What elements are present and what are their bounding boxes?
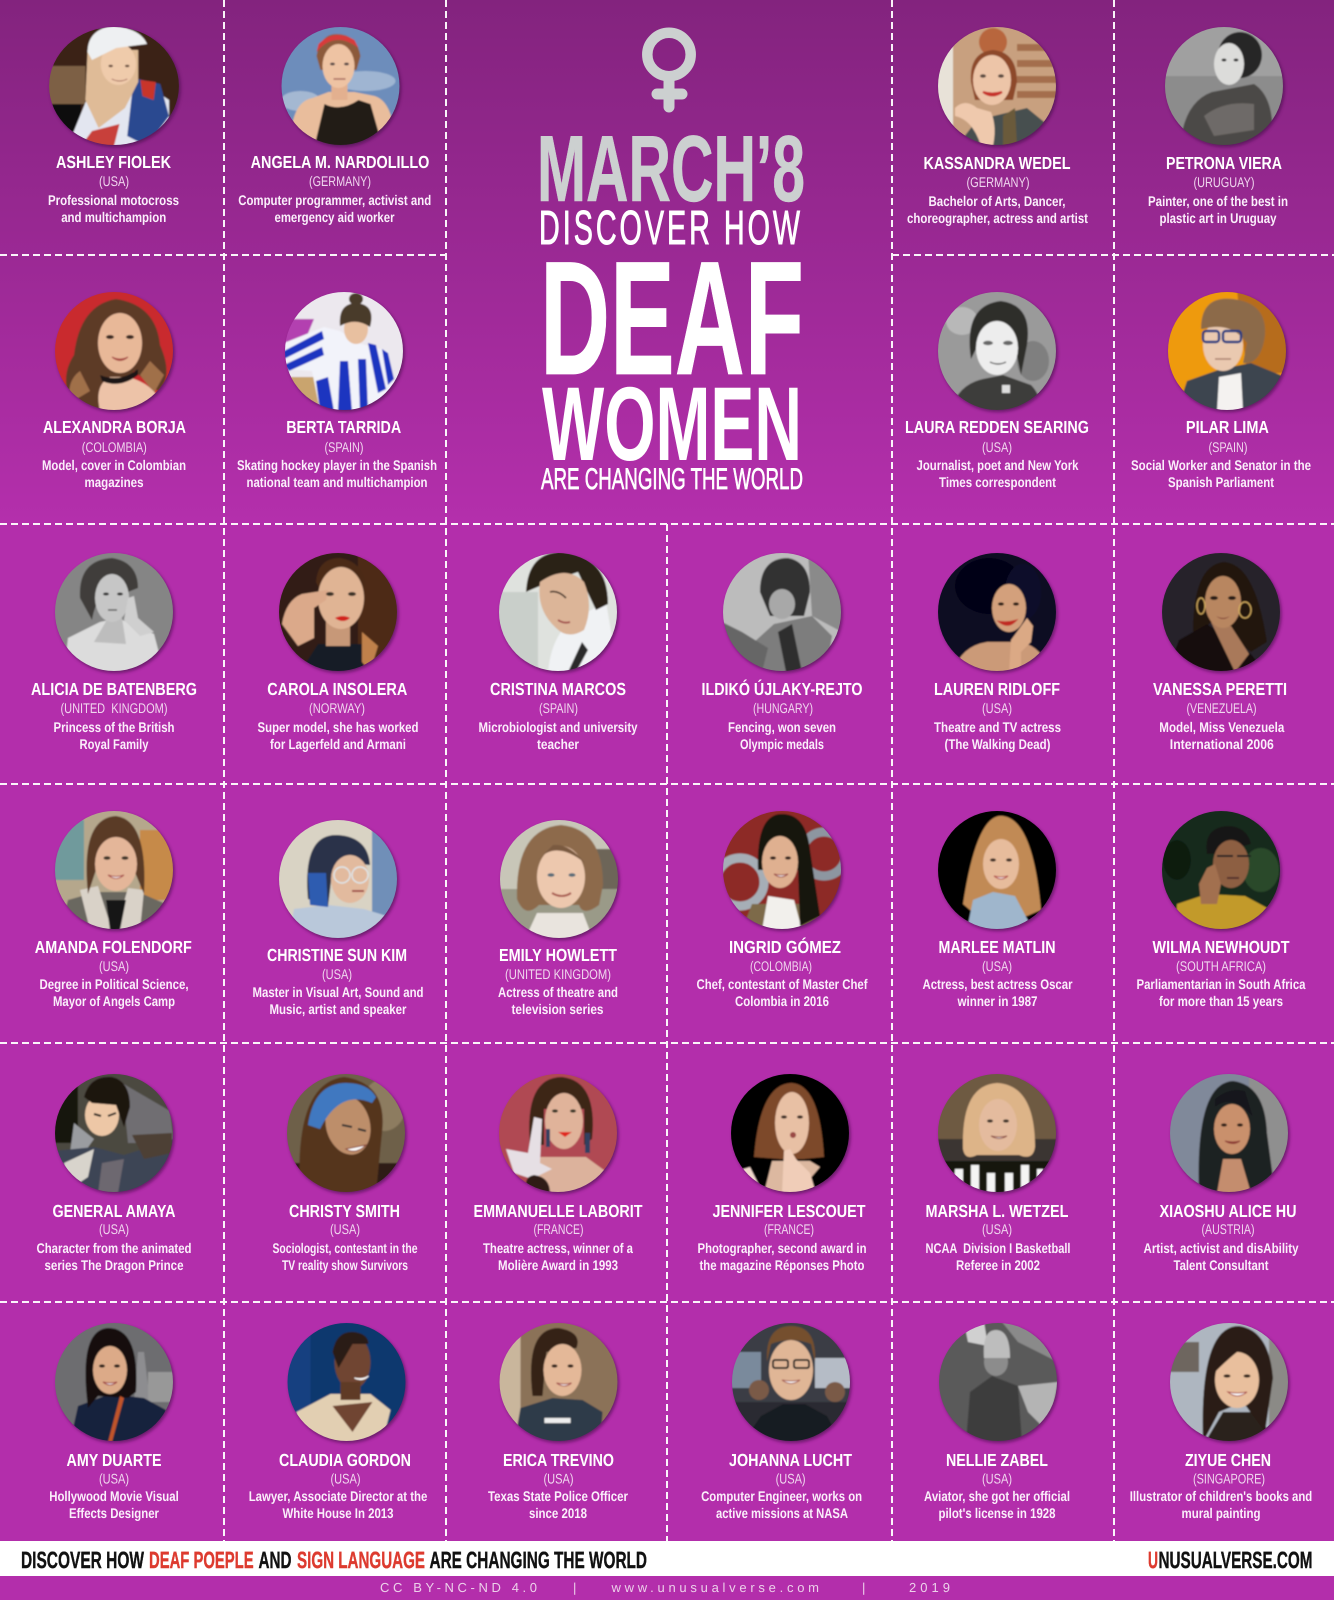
description: television series [512, 1001, 604, 1017]
card: Claudia Gordon [249, 1322, 427, 1521]
portrait: Emmanuelle Laborit [498, 1073, 618, 1194]
name: LAUREN RIDLOFF [934, 679, 1060, 699]
card: Laura Redden Searing [905, 291, 1089, 490]
banner headline: AND [258, 1547, 292, 1573]
country: (USA) [982, 700, 1012, 716]
description: since 2018 [529, 1505, 587, 1521]
name: CRISTINA MARCOS [490, 679, 626, 699]
name: EMMANUELLE LABORIT [474, 1201, 643, 1221]
card: Nellie Zabel [924, 1322, 1070, 1521]
description [49, 1488, 179, 1521]
portrait: Berta Tarrida [284, 291, 404, 412]
country: (FRANCE) [764, 1221, 814, 1237]
description: winner in 1987 [957, 993, 1038, 1009]
footer credits: | [862, 1580, 865, 1595]
description: mural painting [1182, 1505, 1260, 1521]
name: BERTA TARRIDA [286, 417, 401, 437]
portrait: Johanna Lucht [731, 1322, 852, 1443]
card: Cristina Marcos [478, 552, 638, 752]
description: Colombia in 2016 [735, 993, 829, 1009]
country: (COLOMBIA) [750, 958, 812, 974]
footer credits [380, 1580, 950, 1595]
description: International 2006 [1170, 736, 1274, 752]
description: Music, artist and speaker [270, 1001, 407, 1017]
description: Computer Engineer, works on [701, 1488, 862, 1504]
card: Wilma Newhoudt [1136, 810, 1306, 1009]
name: ASHLEY FIOLEK [56, 152, 171, 172]
country: (USA) [982, 958, 1012, 974]
icon: female symbol [647, 33, 691, 107]
description: Olympic medals [740, 736, 824, 752]
description: emergency aid worker [274, 209, 395, 225]
description: choreographer, actress and artist [907, 210, 1088, 226]
description [922, 976, 1073, 1009]
country: (SPAIN) [324, 439, 364, 455]
description: (The Walking Dead) [944, 736, 1050, 752]
banner headline: ARE CHANGING THE WORLD [430, 1547, 647, 1573]
card: Amy Duarte [49, 1322, 179, 1521]
description [54, 719, 174, 752]
card: Pilar Lima [1131, 291, 1311, 490]
portrait: Christy Smith [286, 1073, 406, 1194]
description [498, 984, 618, 1017]
country: (USA) [982, 1470, 1012, 1486]
card: Kassandra Wedel [907, 26, 1088, 226]
bottom white banner [0, 1541, 1334, 1576]
description [42, 457, 186, 490]
footer credits: 2019 [909, 1580, 950, 1595]
description [916, 457, 1079, 490]
title: Women: WOMEN [542, 366, 802, 483]
country: (USA) [99, 958, 129, 974]
country: (USA) [544, 1470, 574, 1486]
name: MARSHA L. WETZEL [926, 1201, 1069, 1221]
portrait: Carola Insolera [278, 552, 398, 673]
banner headline: DEAF POEPLE [149, 1547, 254, 1573]
description: Journalist, poet and New York [916, 457, 1079, 473]
portrait: Amanda Folendorf [54, 810, 174, 931]
portrait: Lauren Ridloff [937, 552, 1058, 673]
country: (GERMANY) [966, 174, 1030, 190]
country: (USA) [99, 1221, 129, 1237]
country: (AUSTRIA) [1202, 1221, 1254, 1237]
portrait: Xiaoshu Alice Hu [1169, 1073, 1290, 1194]
description [1131, 457, 1311, 490]
portrait: Angela M. Nardolillo [280, 26, 401, 147]
banner headline: DISCOVER HOW [21, 1547, 145, 1573]
footer credits: CC BY-NC-ND 4.0 [380, 1580, 537, 1595]
description [1130, 1488, 1312, 1521]
description: Talent Consultant [1174, 1257, 1269, 1273]
description: active missions at NASA [716, 1505, 848, 1521]
title: Deaf: DEAF [540, 228, 804, 409]
description: Times correspondent [939, 474, 1056, 490]
card: Vanessa Peretti [1153, 552, 1287, 752]
name: CLAUDIA GORDON [279, 1450, 411, 1470]
name: PETRONA VIERA [1166, 153, 1282, 173]
title: March'8: MARCH’8 [537, 116, 805, 221]
description [40, 976, 188, 1009]
description [272, 1240, 418, 1273]
description: Referee in 2002 [956, 1257, 1040, 1273]
description: Effects Designer [69, 1505, 159, 1521]
name: ERICA TREVINO [503, 1450, 614, 1470]
portrait: Ziyue Chen [1169, 1322, 1290, 1443]
country: (USA) [330, 1221, 360, 1237]
country: (USA) [99, 1470, 129, 1486]
card: Emmanuelle Laborit [474, 1073, 643, 1273]
description: magazines [84, 474, 144, 490]
card: Ziyue Chen [1130, 1322, 1312, 1521]
portrait: Petrona Viera [1164, 26, 1284, 147]
footer credits: | [573, 1580, 576, 1595]
name: JOHANNA LUCHT [729, 1450, 852, 1470]
title: are changing the world: ARE CHANGING THE WORLD [541, 463, 803, 496]
description [238, 192, 431, 225]
description: Actress, best actress Oscar [922, 976, 1073, 992]
description [701, 1488, 862, 1521]
country: (NORWAY) [309, 700, 365, 716]
description [1136, 976, 1306, 1009]
card: General Amaya [36, 1073, 192, 1273]
country: (FRANCE) [534, 1221, 584, 1237]
description [926, 1240, 1070, 1273]
portrait: Claudia Gordon [286, 1322, 407, 1443]
country: (GERMANY) [309, 173, 371, 189]
description: Lawyer, Associate Director at the [249, 1488, 427, 1504]
description [249, 1488, 427, 1521]
description [478, 719, 638, 752]
country: (USA) [776, 1470, 806, 1486]
card: Jennifer Lescouet [698, 1073, 866, 1273]
description: Princess of the British [54, 719, 174, 735]
name: WILMA NEWHOUDT [1152, 937, 1290, 957]
country: (USA) [982, 439, 1012, 455]
description: national team and multichampion [246, 474, 428, 490]
name: LAURA REDDEN SEARING [905, 417, 1089, 437]
card: Lauren Ridloff [934, 552, 1061, 752]
description: Super model, she has worked [258, 719, 418, 735]
portrait: Nellie Zabel [938, 1322, 1058, 1443]
banner headline: SIGN LANGUAGE [297, 1547, 425, 1573]
description: Computer programmer, activist and [238, 192, 431, 208]
title: Discover how: DISCOVER HOW [539, 202, 803, 255]
description: NCAA Division I Basketball [926, 1240, 1070, 1256]
name: CHRISTY SMITH [289, 1201, 400, 1221]
banner brand: Unusualverse.com: U [1148, 1547, 1158, 1573]
country: (USA) [330, 1470, 360, 1486]
name: KASSANDRA WEDEL [924, 153, 1071, 173]
description [36, 1240, 192, 1273]
description [252, 984, 424, 1017]
card: Emily Howlett [498, 819, 620, 1017]
description: Model, cover in Colombian [42, 457, 186, 473]
name: ALICIA DE BATENBERG [31, 679, 197, 699]
description: pilot's license in 1928 [938, 1505, 1056, 1521]
description: Artist, activist and disAbility [1144, 1240, 1299, 1256]
description: Actress of theatre and [498, 984, 618, 1000]
portrait: Kassandra Wedel [937, 26, 1058, 147]
title block [537, 33, 805, 496]
name: VANESSA PERETTI [1153, 679, 1287, 699]
card: Xiaoshu Alice Hu [1144, 1073, 1299, 1273]
description: Spanish Parliament [1168, 474, 1274, 490]
description [483, 1240, 633, 1273]
portrait: General Amaya [54, 1073, 174, 1194]
portrait: Pilar Lima [1167, 291, 1288, 412]
portrait: Marsha L. Wetzel [937, 1073, 1058, 1194]
description: Mayor of Angels Camp [53, 993, 175, 1009]
description: the magazine Réponses Photo [700, 1257, 864, 1273]
description [934, 719, 1061, 752]
description: Molière Award in 1993 [498, 1257, 618, 1273]
portrait: Jennifer Lescouet [730, 1073, 850, 1194]
card: Ingrid Gómez [696, 810, 868, 1009]
country: (COLOMBIA) [82, 439, 147, 455]
name: ILDIKÓ ÚJLAKY-REJTO [702, 679, 862, 699]
description: Professional motocross [48, 192, 179, 208]
description [924, 1488, 1070, 1521]
name: CAROLA INSOLERA [267, 679, 408, 699]
portrait: Erica Trevino [498, 1322, 619, 1443]
portrait: Wilma Newhoudt [1161, 810, 1282, 931]
description: for Lagerfeld and Armani [270, 736, 406, 752]
name: EMILY HOWLETT [499, 945, 617, 965]
name: ALEXANDRA BORJA [43, 417, 186, 437]
description: Fencing, won seven [728, 719, 836, 735]
country: (URUGUAY) [1194, 174, 1254, 190]
card: Angela M. Nardolillo [238, 26, 431, 225]
card: Johanna Lucht [701, 1322, 862, 1521]
card: Berta Tarrida [237, 291, 437, 490]
portrait: Ashley Fiolek [48, 26, 181, 147]
description: plastic art in Uruguay [1160, 210, 1277, 226]
country: (UNITED KINGDOM) [60, 700, 168, 716]
description: Texas State Police Officer [488, 1488, 628, 1504]
card: Petrona Viera [1148, 26, 1288, 226]
name: GENERAL AMAYA [52, 1201, 176, 1221]
name: PILAR LIMA [1186, 417, 1269, 437]
description: Skating hockey player in the Spanish [237, 457, 437, 473]
name: CHRISTINE SUN KIM [267, 945, 407, 965]
description: teacher [537, 736, 579, 752]
description [237, 457, 437, 490]
description: Degree in Political Science, [40, 976, 188, 992]
portrait: Laura Redden Searing [937, 291, 1058, 412]
description: Hollywood Movie Visual [49, 1488, 179, 1504]
portrait: Ingrid Gómez [716, 810, 846, 931]
portrait: Christine Sun Kim [278, 819, 398, 940]
description: Microbiologist and university [478, 719, 638, 735]
card: Ashley Fiolek [48, 26, 181, 225]
country: (SPAIN) [1208, 439, 1248, 455]
description [48, 192, 179, 225]
description [1144, 1240, 1299, 1273]
name: XIAOSHU ALICE HU [1160, 1201, 1296, 1221]
description [696, 976, 868, 1009]
country: (SPAIN) [539, 700, 578, 716]
description: Character from the animated [36, 1240, 192, 1256]
country: (VENEZUELA) [1186, 700, 1256, 716]
name: NELLIE ZABEL [946, 1450, 1048, 1470]
name: AMY DUARTE [66, 1450, 162, 1470]
card: Christine Sun Kim [252, 819, 424, 1017]
card: Marlee Matlin [922, 810, 1073, 1009]
description [1148, 193, 1288, 226]
name: ZIYUE CHEN [1185, 1450, 1271, 1470]
portrait: Emily Howlett [499, 819, 620, 940]
portrait: Amy Duarte [54, 1322, 174, 1443]
description: for more than 15 years [1159, 993, 1283, 1009]
card: Alexandra Borja [42, 291, 186, 490]
country: (HUNGARY) [753, 700, 813, 716]
portrait: Alexandra Borja [54, 291, 174, 412]
portrait: Vanessa Peretti [1161, 552, 1282, 673]
country: (USA) [99, 173, 129, 189]
description: Bachelor of Arts, Dancer, [928, 193, 1066, 209]
description: Chef, contestant of Master Chef [696, 976, 868, 992]
description: Sociologist, contestant in the [272, 1240, 418, 1256]
description: and multichampion [61, 209, 166, 225]
description: Model, Miss Venezuela [1159, 719, 1284, 735]
card: Ildikó Újlaky-Rejto [702, 552, 862, 752]
country: (UNITED KINGDOM) [505, 966, 611, 982]
card: Erica Trevino [488, 1322, 628, 1521]
footer credits: www.unusualverse.com [610, 1580, 819, 1595]
name: AMANDA FOLENDORF [35, 937, 192, 957]
portrait: Alicia de Batenberg [54, 552, 174, 673]
description [1159, 719, 1284, 752]
description: Theatre actress, winner of a [483, 1240, 633, 1256]
description [488, 1488, 628, 1521]
description: Painter, one of the best in [1148, 193, 1288, 209]
card: Carola Insolera [258, 552, 418, 752]
card: Marsha L. Wetzel [926, 1073, 1070, 1273]
country: (SINGAPORE) [1193, 1470, 1265, 1486]
name: ANGELA M. NARDOLILLO [251, 152, 429, 172]
description: Theatre and TV actress [934, 719, 1061, 735]
description [907, 193, 1088, 226]
country: (SOUTH AFRICA) [1176, 958, 1266, 974]
description [258, 719, 418, 752]
description [698, 1240, 866, 1273]
country: (USA) [982, 1221, 1012, 1237]
description: Master in Visual Art, Sound and [252, 984, 424, 1000]
name: JENNIFER LESCOUET [712, 1201, 866, 1221]
description: Royal Family [80, 736, 149, 752]
country: (USA) [322, 966, 352, 982]
name: INGRID GÓMEZ [729, 937, 841, 957]
description: White House In 2013 [282, 1505, 394, 1521]
description: Photographer, second award in [698, 1240, 866, 1256]
description: series The Dragon Prince [44, 1257, 184, 1273]
name: MARLEE MATLIN [938, 937, 1056, 957]
portrait: Ildikó Újlaky-Rejto [722, 552, 842, 673]
portrait: Marlee Matlin [937, 810, 1058, 931]
card: Alicia de Batenberg [31, 552, 197, 752]
description: Aviator, she got her official [924, 1488, 1070, 1504]
description [728, 719, 836, 752]
banner headline [21, 1547, 647, 1573]
card: Christy Smith [272, 1073, 418, 1273]
card: Amanda Folendorf [35, 810, 192, 1009]
portrait: Cristina Marcos [498, 552, 618, 673]
description: TV reality show Survivors [282, 1257, 408, 1273]
